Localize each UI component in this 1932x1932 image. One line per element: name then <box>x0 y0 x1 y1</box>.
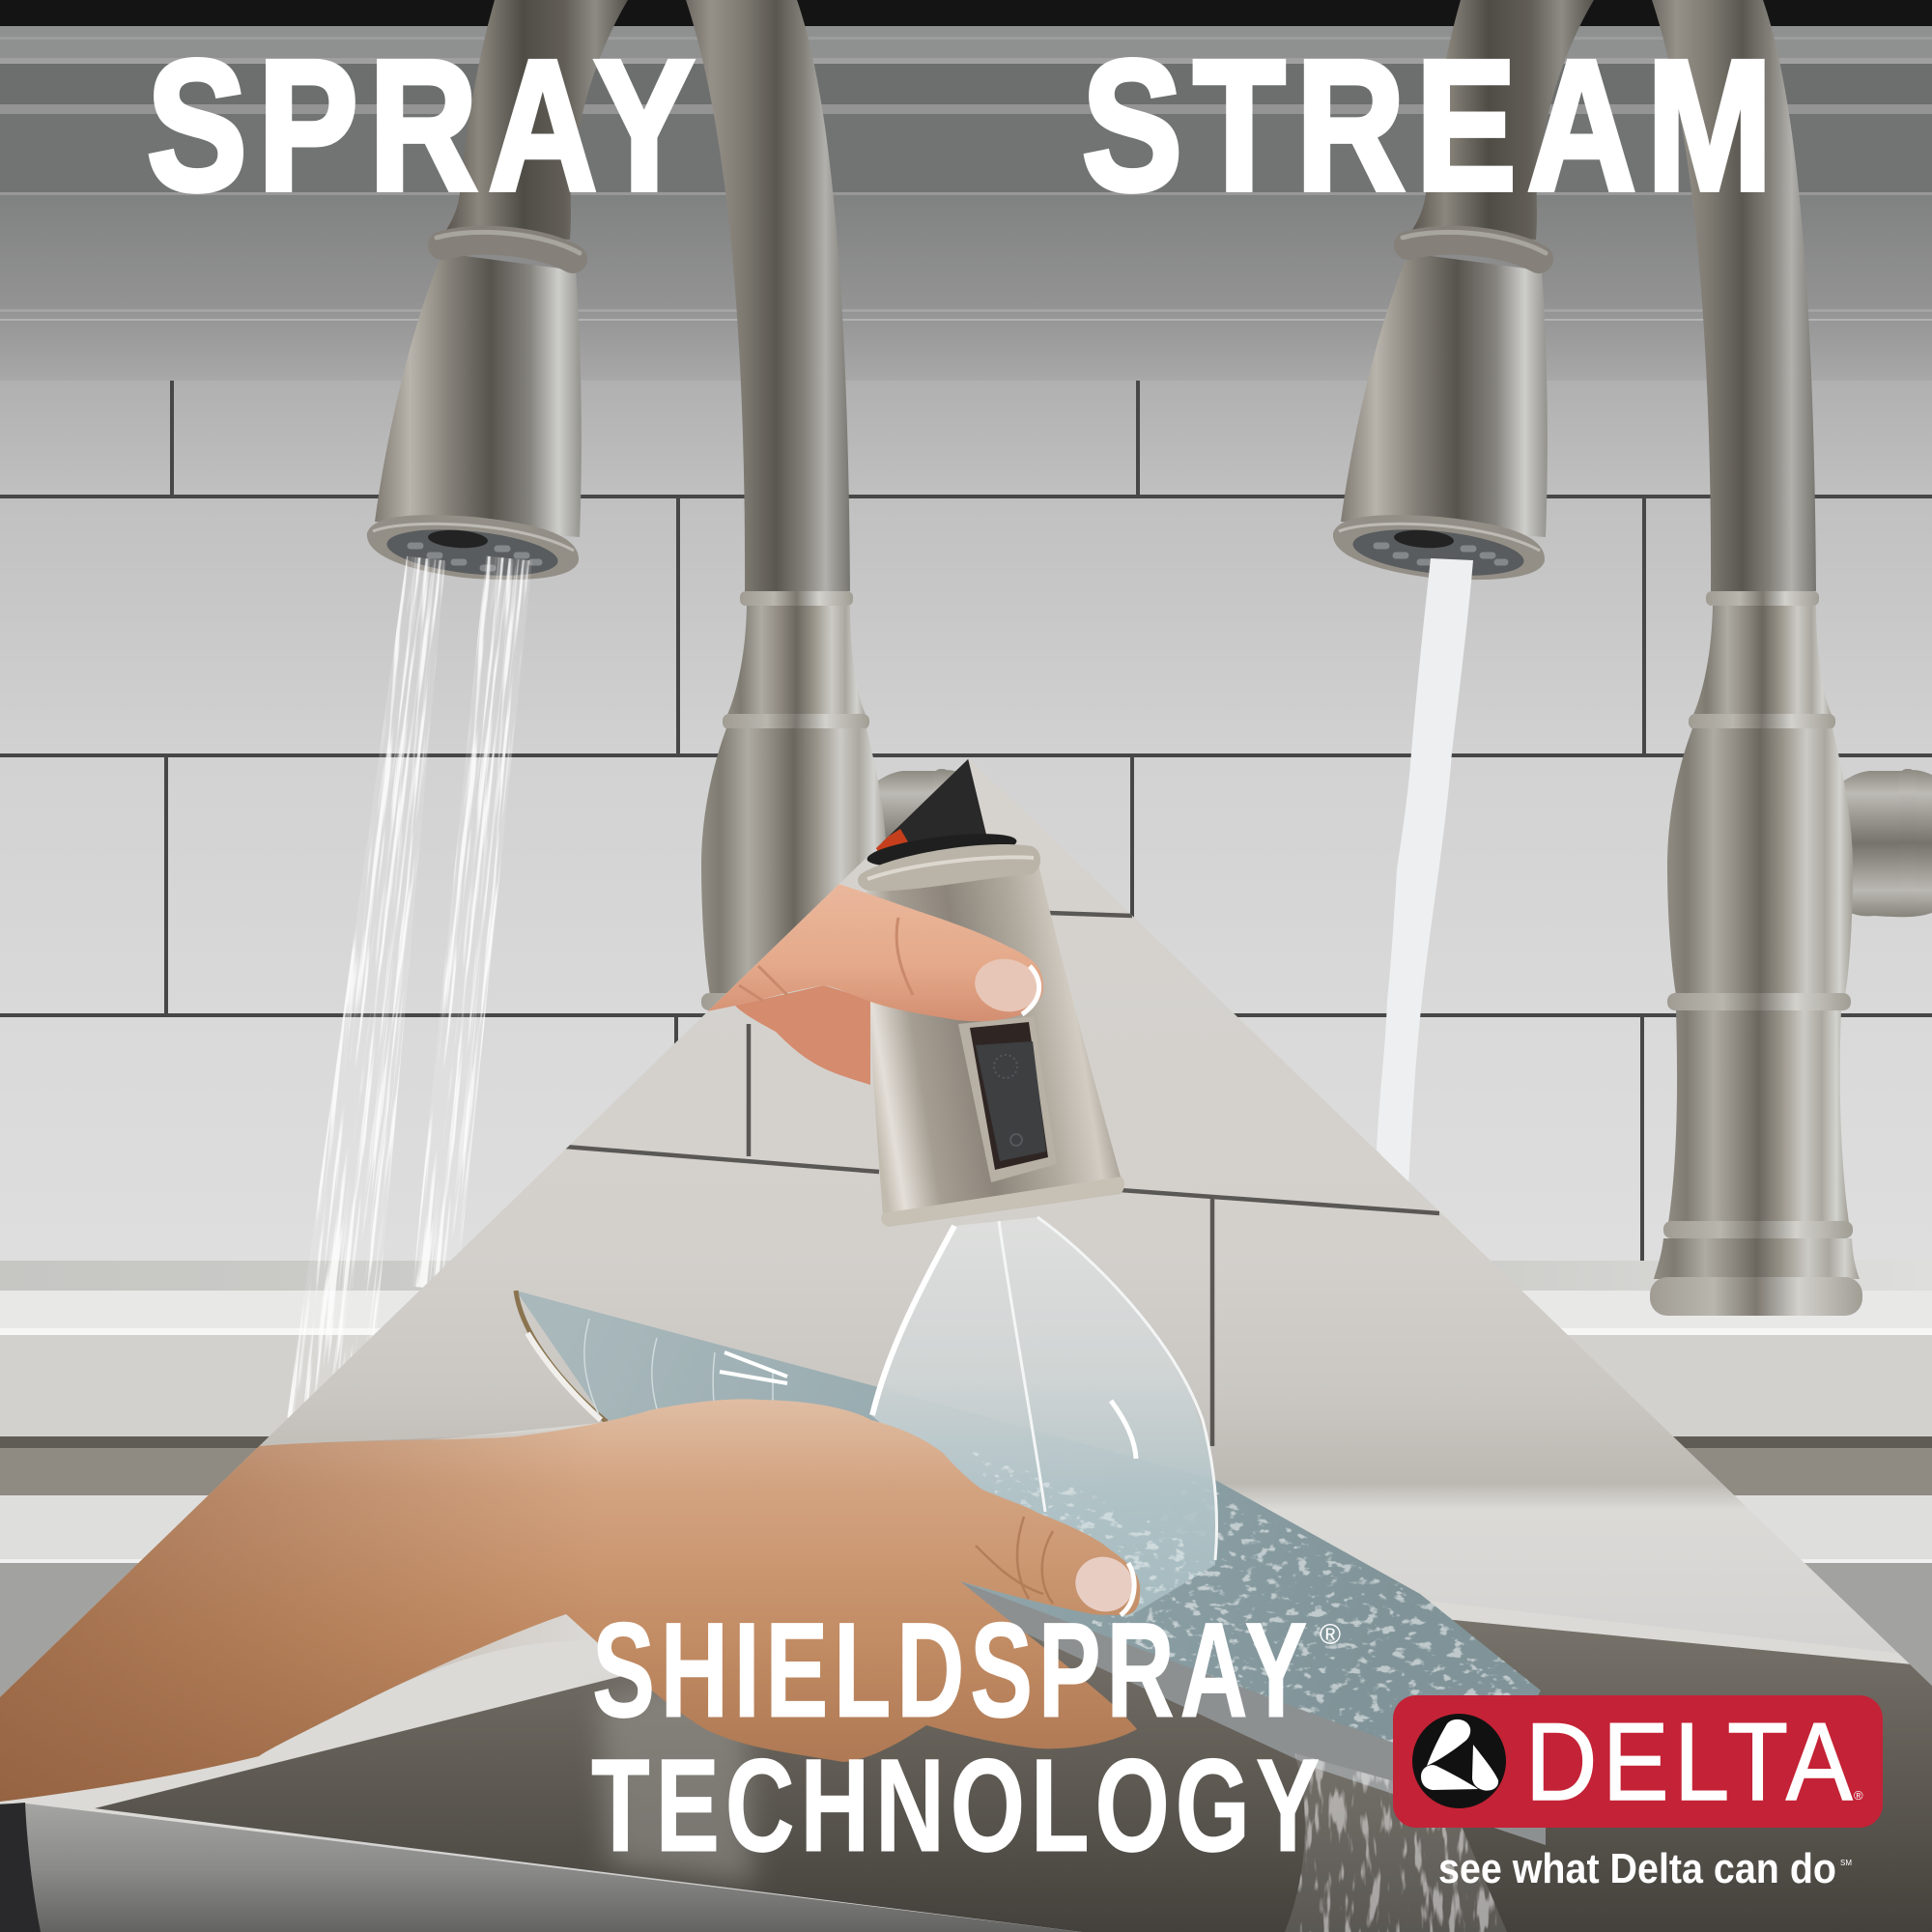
hand on sprayer <box>707 884 1043 1085</box>
sink bowl reflection <box>599 1662 753 1884</box>
sprayer body <box>867 860 1122 1215</box>
heading: shieldspray technology <box>591 1594 1341 1880</box>
tile grout <box>565 913 1439 1446</box>
forearm shading <box>0 1432 543 1802</box>
dish rim <box>516 1291 607 1422</box>
heading: shieldspray technology: TECHNOLOGY <box>591 1732 1325 1880</box>
countertop and sink edge <box>0 1261 450 1697</box>
water dome <box>871 1217 1216 1618</box>
countertop and sink edge <box>1491 1261 1932 1686</box>
tile wall and molding <box>0 0 966 1261</box>
icon: delta emblem <box>1412 1714 1506 1808</box>
dish lower rim <box>960 1581 1546 1845</box>
sprayer top ring <box>858 844 1040 891</box>
faucet <box>1333 0 1932 1316</box>
spray water stream, right <box>411 556 532 1291</box>
button power icon <box>1010 1134 1022 1146</box>
sprayer button <box>958 1016 1057 1182</box>
sprayer bottom ring <box>881 1177 1124 1227</box>
finger <box>707 884 1043 1021</box>
dark towel <box>0 1803 41 1932</box>
sink front edge <box>0 1804 1082 1932</box>
heading: shieldspray technology: ® <box>1320 1619 1341 1651</box>
tile wall <box>0 758 1932 1932</box>
heading: stream: STREAM <box>1082 21 1783 229</box>
delta logo <box>1393 1695 1883 1828</box>
logo wordmark: DELTA <box>1525 1701 1858 1824</box>
faucet <box>367 0 956 1010</box>
glass dish <box>516 1291 1541 1787</box>
delta logo: ® <box>1854 1788 1863 1803</box>
heading: spray: SPRAY <box>147 21 705 229</box>
falling water splash <box>1285 1753 1507 1932</box>
knuckle creases <box>976 1517 1053 1604</box>
thumb nail <box>1075 1557 1137 1617</box>
fingernail <box>970 953 1043 1017</box>
solid water stream <box>1377 558 1473 1188</box>
dish water texture <box>1092 1492 1532 1743</box>
heading: shieldspray technology: SHIELDSPRAY <box>592 1594 1313 1746</box>
button dot ring <box>994 1055 1017 1078</box>
panel: spray <box>0 0 966 1697</box>
arm and hand <box>0 1399 1140 1802</box>
spray water stream, left <box>288 556 445 1418</box>
dish ribs and highlights <box>583 1319 774 1415</box>
panel: shieldspray triangle <box>0 758 1932 1932</box>
sink rim <box>1897 1653 1932 1686</box>
tagline: see what Delta can do <box>1438 1845 1836 1892</box>
tile wall and molding <box>966 0 1932 1261</box>
sink bowl <box>95 1584 1932 1932</box>
panel: stream <box>966 0 1932 1686</box>
sprayer hose connector <box>865 758 987 852</box>
pull-down sprayer <box>858 758 1124 1227</box>
finger creases <box>739 918 913 1001</box>
tagline: SM <box>1840 1859 1852 1867</box>
back counter highlight <box>433 1423 597 1439</box>
palm <box>735 985 870 1085</box>
